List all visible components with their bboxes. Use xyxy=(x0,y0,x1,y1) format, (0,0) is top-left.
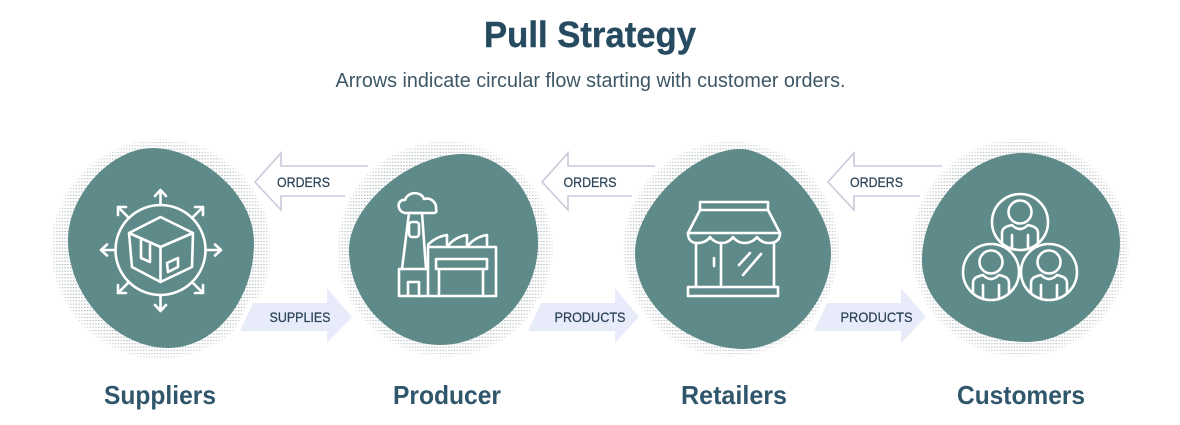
icon: factory xyxy=(399,193,496,296)
icon: three customers xyxy=(963,194,1077,300)
arrow: orders to suppliers xyxy=(255,153,368,210)
panel: retailers xyxy=(623,141,839,410)
icon: box with outward arrows xyxy=(101,190,221,311)
name: customers: Customers xyxy=(957,380,1085,410)
arrow: products to retailers xyxy=(528,288,639,343)
icon: storefront xyxy=(688,202,780,296)
arrow: products to customers: PRODUCTS xyxy=(840,309,912,325)
customer: right xyxy=(1021,244,1077,300)
customer: top xyxy=(992,194,1048,250)
dotted halo: customers xyxy=(911,139,1129,357)
blob: retailers xyxy=(635,149,831,349)
blob: producer xyxy=(349,154,538,345)
panel: suppliers xyxy=(51,139,271,410)
arrow: orders to producer: ORDERS xyxy=(564,174,616,190)
arrow: orders to producer xyxy=(542,153,655,210)
dotted halo: producer xyxy=(337,141,553,357)
blob: suppliers xyxy=(68,148,254,348)
arrow: supplies: SUPPLIES xyxy=(270,309,330,325)
arrow: supplies xyxy=(240,288,352,343)
name: producer: Producer xyxy=(393,380,501,410)
blob: customers xyxy=(922,153,1120,342)
arrow: orders to suppliers: ORDERS xyxy=(277,174,330,190)
arrow: products to retailers: PRODUCTS xyxy=(554,309,626,325)
customer: left xyxy=(963,244,1019,300)
dotted halo: retailers xyxy=(623,141,839,357)
arrow: orders to retailers: ORDERS xyxy=(850,174,903,190)
title: Pull Strategy xyxy=(484,14,696,55)
arrow: products to customers xyxy=(814,288,926,343)
panel: producer xyxy=(337,141,553,410)
subtitle: Arrows indicate circular flow starting with customer orders. xyxy=(336,70,846,92)
arrow: orders to retailers xyxy=(828,153,942,210)
panel: customers xyxy=(911,139,1129,410)
name: suppliers: Suppliers xyxy=(104,380,216,410)
dotted halo: suppliers xyxy=(51,139,271,359)
name: retailers: Retailers xyxy=(681,380,787,410)
